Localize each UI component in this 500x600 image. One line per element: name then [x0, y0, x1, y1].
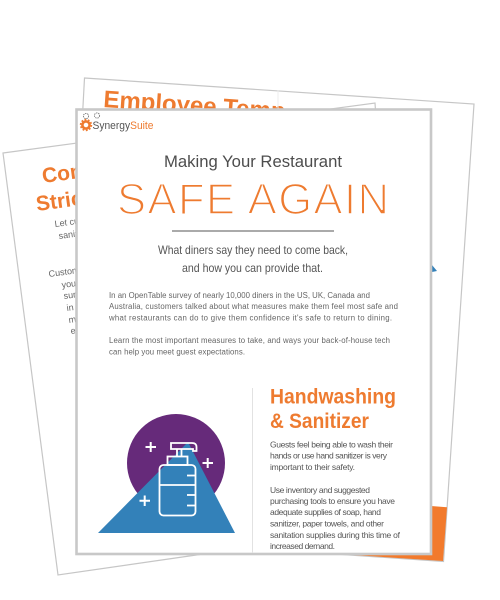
title: safe again: SAFE AGAIN	[117, 176, 389, 224]
handwashing body text: sanitation supplies during this time of	[270, 530, 401, 540]
icon: gears	[81, 113, 100, 130]
handwashing body text: sanitizer, paper towels, and other	[270, 518, 384, 528]
left page text: Custom	[48, 265, 80, 279]
handwashing body text: Guests feel being able to wash their	[270, 440, 393, 450]
title: making your restaurant: Making Your Restaurant	[164, 152, 342, 171]
blue corner fragment	[432, 265, 437, 272]
left page text: in	[66, 302, 74, 313]
left page heading: Stric	[35, 187, 84, 216]
handwashing body text: adequate supplies of soap, hand	[270, 507, 381, 517]
heading: handwashing & sanitizer: & Sanitizer	[270, 410, 369, 433]
intro text	[108, 291, 398, 356]
intro text: what restaurants can do to give them confidence it's safe to return to dining.	[108, 314, 392, 322]
bottle	[160, 443, 196, 516]
sparkles	[140, 442, 213, 506]
back page: left	[3, 103, 395, 575]
front page	[76, 110, 431, 554]
left page text: e	[70, 325, 76, 336]
left page heading: Con	[41, 160, 84, 188]
handwashing body text	[270, 440, 401, 551]
back page: right	[60, 78, 474, 562]
handwashing body text: important to their safety.	[270, 462, 355, 472]
intro text: In an OpenTable survey of nearly 10,000 diners in the US, UK, Canada and	[109, 291, 370, 300]
orange footer band	[346, 506, 447, 561]
left page heading	[35, 160, 84, 216]
heading: handwashing & sanitizer: Handwashing	[270, 386, 396, 408]
left page text: you	[61, 278, 77, 290]
heading: handwashing & sanitizer	[270, 386, 396, 433]
intro text: can help you meet guest expectations.	[109, 348, 245, 356]
logo: SynergySuite	[92, 120, 154, 132]
intro text: Australia, customers talked about what measures make them feel most safe and	[109, 302, 398, 311]
left page text	[48, 216, 80, 336]
subtitle: What diners say they need to come back,	[158, 243, 348, 257]
left page text: sanit	[58, 228, 79, 241]
left page text: sur	[63, 289, 77, 301]
subtitle	[158, 243, 348, 275]
left page text: m	[68, 314, 77, 325]
handwashing body text: purchasing tools to ensure you have	[270, 496, 395, 506]
handwashing body text: hands or use hand sanitizer is very	[270, 450, 388, 460]
left page text: Let cu	[54, 216, 80, 229]
handwashing body text: increased demand.	[270, 541, 335, 551]
back page heading: Employee Temp	[103, 86, 286, 125]
icon: hand sanitizer	[98, 414, 235, 533]
logo	[81, 113, 154, 132]
subtitle: and how you can provide that.	[182, 261, 323, 275]
intro text: Learn the most important measures to take, and ways your back-of-house tech	[109, 336, 390, 345]
handwashing body text: Use inventory and suggested	[270, 485, 370, 495]
